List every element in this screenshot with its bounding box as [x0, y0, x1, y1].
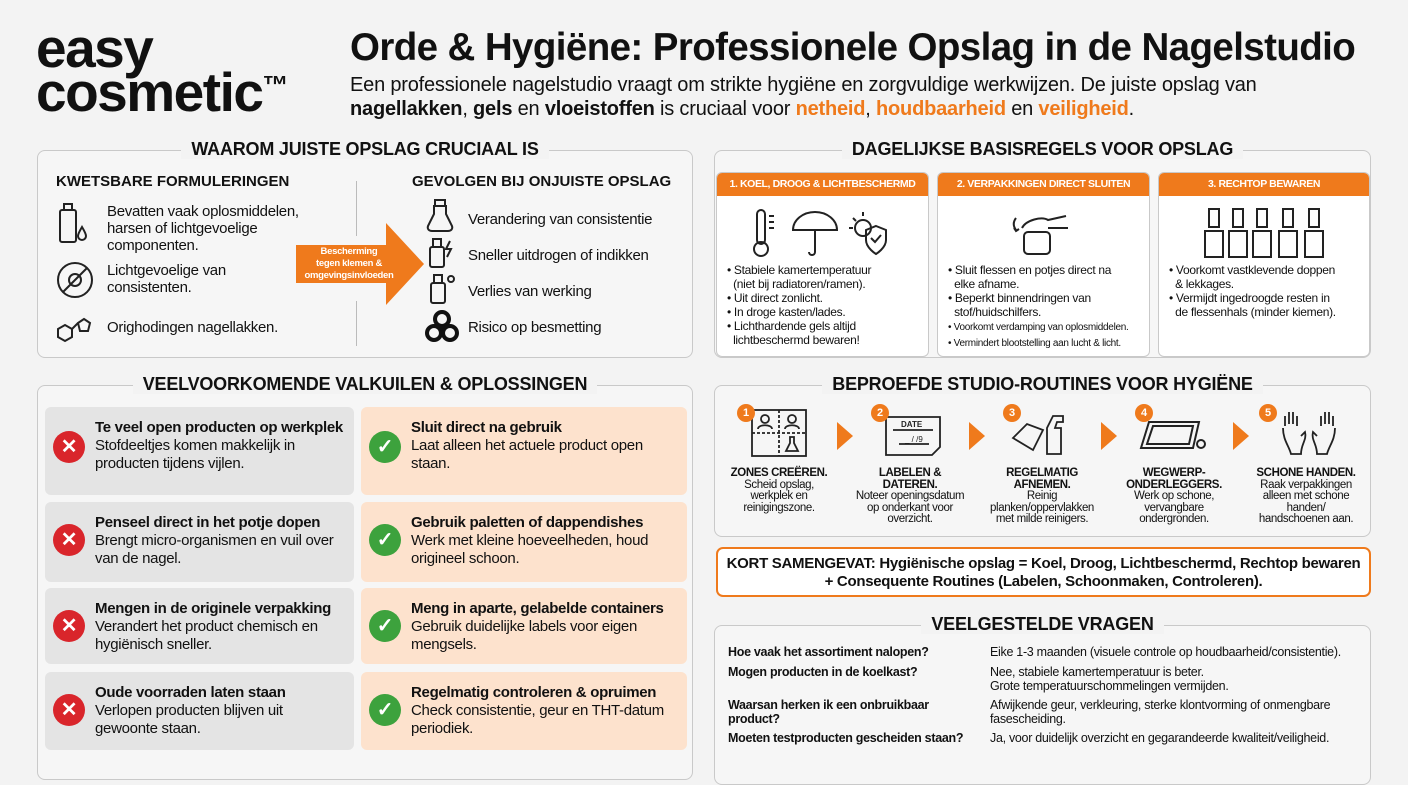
solution 2: Gebruik paletten of dappendishes	[411, 514, 643, 531]
pitfall 2: Penseel direct in het potje dopen	[95, 514, 320, 531]
panel: faq: product?	[728, 712, 780, 726]
step 5: Raak verpakkingen	[1260, 478, 1352, 490]
solution 1: ✓	[377, 436, 393, 458]
solution 3: Meng in aparte, gelabelde containers	[411, 600, 664, 617]
pitfall 4: Oude voorraden laten staan	[95, 684, 286, 701]
summary box: KORT SAMENGEVAT: Hygiënische opslag = Koel, Droog, Lichtbeschermd, Rechtop bewaren	[727, 555, 1360, 572]
step 2: _ / /9	[904, 435, 923, 444]
heading: gevolgen: GEVOLGEN BIJ ONJUISTE OPSLAG	[412, 173, 671, 190]
panel: waarom juiste opslag: Sneller uitdrogen of indikken	[468, 247, 649, 264]
panel: faq: Grote temperatuurschommelingen vermijden.	[990, 679, 1229, 693]
icon: hand closing jar	[1012, 215, 1068, 255]
step 4: Werk op schone,	[1134, 490, 1214, 502]
pitfall 3: Mengen in de originele verpakking	[95, 600, 331, 617]
panel: waarom juiste opslag: Orighodingen nagellakken.	[107, 319, 278, 336]
step 2: 2	[877, 407, 883, 419]
step 1	[730, 404, 827, 514]
pitfall 2: ✕	[61, 529, 77, 551]
subtitle: Een professionele nagelstudio vraagt om strikte hygiëne en zorgvuldige werkwijzen. De juiste opslag van	[350, 74, 1257, 96]
solution 3	[361, 588, 687, 664]
panel: dagelijkse basisregels	[714, 150, 1371, 358]
panel: faq: Afwijkende geur, verkleuring, sterke klontvorming of onmengbare	[990, 698, 1330, 712]
step 3: Reinig	[1027, 490, 1057, 502]
solution 2	[361, 502, 687, 582]
heading: kwetsbare: KWETSBARE FORMULERINGEN	[56, 173, 289, 190]
list: gevolgen	[425, 199, 652, 342]
step 1: reinigingszone.	[743, 502, 815, 514]
card 3: • Vermijdt ingedroogde resten in	[1169, 291, 1330, 305]
panel: waarom juiste opslag: Verandering van consistentie	[468, 211, 652, 228]
step 5: handschoenen aan.	[1259, 513, 1353, 525]
step 2: Noteer openingsdatum	[856, 490, 964, 502]
step 5	[1256, 404, 1356, 525]
panel: faq: fasescheiding.	[990, 712, 1066, 726]
step 2: DATEREN.	[883, 478, 937, 490]
step 4: WEGWERP-	[1143, 467, 1205, 479]
panel: waarom juiste opslag: Verlies van werking	[468, 283, 592, 300]
logo: easy	[36, 17, 152, 79]
card 1: • In droge kasten/lades.	[727, 305, 845, 319]
step 5: 5	[1265, 407, 1271, 419]
panel: waarom juiste opslag: Lichtgevoelige van consistenten.	[107, 262, 226, 296]
step 5: alleen met schone	[1263, 490, 1349, 502]
solution 4	[361, 672, 687, 750]
card 1: lichtbeschermd bewaren!	[733, 333, 860, 347]
pitfall 2: Brengt micro-organismen en vuil over van de nagel.	[95, 532, 333, 567]
pitfall 1: Te veel open producten op werkplek	[95, 419, 343, 436]
solution 2: ✓	[377, 529, 393, 551]
step 5: handen/	[1287, 502, 1325, 514]
step 3: planken/oppervlakken	[990, 502, 1094, 514]
pitfall 3: Verandert het product chemisch en hygiënisch sneller.	[95, 618, 318, 653]
card 2: stof/huidschilfers.	[954, 305, 1041, 319]
step 4: vervangbare	[1144, 502, 1204, 514]
step 1: Scheid opslag,	[744, 478, 814, 490]
solution 4: Regelmatig controleren & opruimen	[411, 684, 656, 701]
panel: faq	[714, 625, 1371, 785]
logo	[36, 17, 287, 123]
solution 1: Laat alleen het actuele product open staan.	[411, 437, 643, 472]
card 2: 2. VERPAKKINGEN DIRECT SLUITEN	[957, 178, 1130, 190]
card 1	[716, 172, 929, 357]
step 3: REGELMATIG	[1006, 467, 1078, 479]
card 1: • Lichthardende gels altijd	[727, 319, 856, 333]
pitfall 2	[45, 502, 354, 582]
card 3: de flessenhals (minder kiemen).	[1175, 305, 1336, 319]
text: WAAROM JUISTE OPSLAG CRUCIAAL IS	[191, 139, 539, 159]
step 3	[990, 404, 1094, 525]
step 4	[1126, 404, 1222, 525]
arrow	[837, 422, 853, 450]
arrow: bescherming	[296, 223, 424, 305]
panel: faq: Waarsan herken ik een onbruikbaar	[728, 698, 929, 712]
pitfall 3	[45, 588, 354, 664]
icons: thermometer umbrella sun	[753, 209, 887, 257]
step 2	[856, 404, 964, 525]
card 3: • Voorkomt vastklevende doppen	[1169, 263, 1335, 277]
card 2: elke afname.	[954, 277, 1019, 291]
card 1: • Stabiele kamertemperatuur	[727, 263, 871, 277]
step 5: SCHONE HANDEN.	[1256, 467, 1356, 479]
summary box	[716, 547, 1371, 597]
text: VEELGESTELDE VRAGEN	[931, 614, 1154, 634]
card 1: • Uit direct zonlicht.	[727, 291, 823, 305]
pitfall 1	[45, 407, 354, 495]
arrow: bescherming: Bescherming	[321, 246, 377, 257]
panel: waarom juiste opslag: Bevatten vaak oplosmiddelen, harsen of lichtgevoelige componenten.	[107, 203, 299, 254]
step 2: DATE	[901, 420, 923, 429]
pitfall 3: ✕	[61, 615, 77, 637]
list: kwetsbare	[57, 203, 299, 342]
solution 1: Sluit direct na gebruik	[411, 419, 562, 436]
card 2: • Voorkomt verdamping van oplosmiddelen.	[948, 322, 1128, 333]
logo: cosmetic™	[36, 61, 287, 123]
divider line	[356, 181, 357, 236]
step 3: met milde reinigers.	[996, 513, 1088, 525]
pitfall 1: ✕	[61, 436, 77, 458]
panel: waarom juiste opslag: Risico op besmetting	[468, 319, 601, 336]
arrow: bescherming: tegen klemen &	[316, 258, 382, 269]
pitfall 4: ✕	[61, 699, 77, 721]
step 2: op onderkant voor	[867, 502, 953, 514]
panel: faq: Ja, voor duidelijk overzicht en gegarandeerde kwaliteit/veiligheid.	[990, 731, 1329, 745]
subtitle: nagellakken, gels en vloeistoffen is cruciaal voor netheid, houdbaarheid en veiligheid.	[350, 98, 1134, 120]
solution 4: Check consistentie, geur en THT-datum periodiek.	[411, 702, 664, 737]
pitfall 4	[45, 672, 354, 750]
solution 2: Werk met kleine hoeveelheden, houd origineel schoon.	[411, 532, 648, 567]
panel: faq: Moeten testproducten gescheiden staan?	[728, 731, 963, 745]
card 2	[937, 172, 1150, 357]
step 2: overzicht.	[887, 513, 933, 525]
text: DAGELIJKSE BASISREGELS VOOR OPSLAG	[852, 139, 1233, 159]
card 1: (niet bij radiatoren/ramen).	[733, 277, 865, 291]
card 3: 3. RECHTOP BEWAREN	[1208, 178, 1320, 190]
panel: waarom juiste opslag	[37, 150, 693, 358]
card 1: 1. KOEL, DROOG & LICHTBESCHERMD	[730, 178, 915, 190]
panel: valkuilen & oplossingen	[37, 385, 693, 780]
icon: bottles	[1204, 208, 1324, 258]
panel: faq: Mogen producten in de koelkast?	[728, 665, 917, 679]
panel: faq: Eike 1-3 maanden (visuele controle op houdbaarheid/consistentie).	[990, 645, 1341, 659]
subtitle	[350, 74, 1257, 120]
pitfall 4: Verlopen producten blijven uit gewoonte staan.	[95, 702, 283, 737]
pitfall 1: Stofdeeltjes komen makkelijk in producten tijdens vijlen.	[95, 437, 295, 472]
step 4: ONDERLEGGERS.	[1126, 478, 1222, 490]
text: BEPROEFDE STUDIO-ROUTINES VOOR HYGIËNE	[832, 374, 1253, 394]
step 4: 4	[1141, 407, 1147, 419]
step 3: AFNEMEN.	[1014, 478, 1070, 490]
summary box: + Consequente Routines (Labelen, Schoonmaken, Controleren).	[825, 573, 1262, 590]
card 3	[1158, 172, 1370, 357]
title: Orde & Hygiëne: Professionele Opslag in de Nagelstudio	[350, 26, 1355, 69]
solution 1	[361, 407, 687, 495]
card 2: • Vermindert blootstelling aan lucht & licht.	[948, 338, 1121, 349]
step 4: ondergronden.	[1139, 513, 1209, 525]
text: VEELVOORKOMENDE VALKUILEN & OPLOSSINGEN	[143, 374, 587, 394]
panel: studio-routines	[714, 385, 1371, 537]
faq rows: Hoe vaak het assortiment nalopen?	[728, 645, 929, 659]
solution 3: ✓	[377, 615, 393, 637]
card 2: • Sluit flessen en potjes direct na	[948, 263, 1111, 277]
arrow: bescherming: omgevingsinvloeden	[304, 270, 394, 281]
step 1: ZONES CREËREN.	[731, 467, 827, 479]
panel: faq: Nee, stabiele kamertemperatuur is beter.	[990, 665, 1204, 679]
step 2: LABELEN &	[879, 467, 941, 479]
solution 4: ✓	[377, 699, 393, 721]
solution 3: Gebruik duidelijke labels voor eigen mengsels.	[411, 618, 637, 653]
card 2: • Beperkt binnendringen van	[948, 291, 1091, 305]
card 3: & lekkages.	[1175, 277, 1234, 291]
step 1: werkplek en	[751, 490, 807, 502]
step 1: 1	[743, 407, 749, 419]
step 3: 3	[1009, 407, 1015, 419]
